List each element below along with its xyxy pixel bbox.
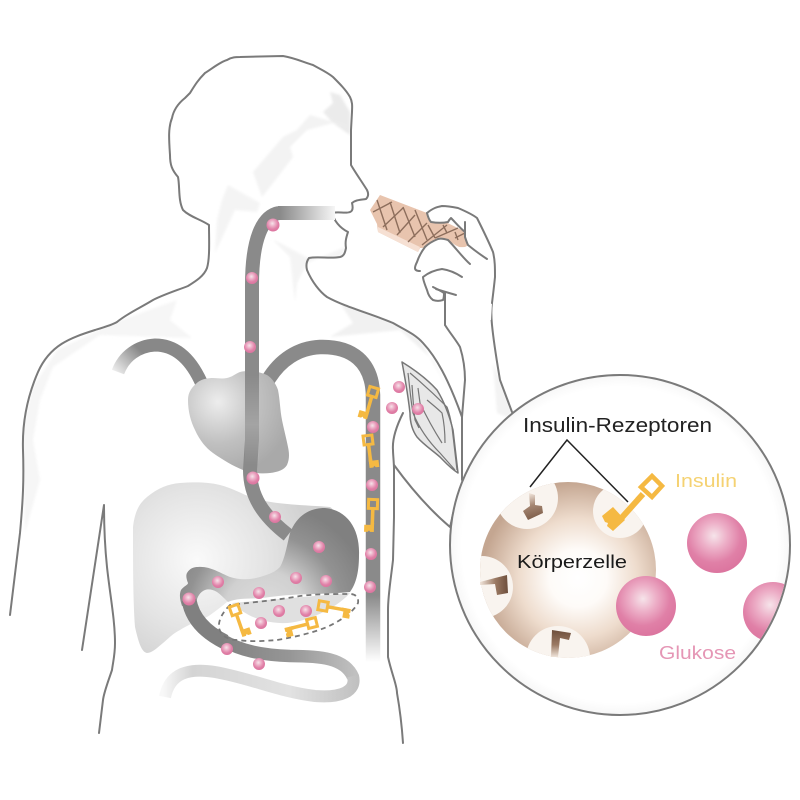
small intestine: [165, 600, 354, 697]
muscle: [402, 362, 458, 473]
dashed outline: [219, 594, 358, 641]
chest line: [394, 465, 455, 527]
left artery: [118, 345, 201, 382]
heart: [188, 371, 289, 473]
liver: [133, 482, 334, 653]
magnified view: [450, 375, 800, 715]
insulin keys in pancreas: [229, 601, 351, 638]
receptors: [480, 493, 571, 657]
wafer bar: [370, 195, 468, 252]
glucose spheres: [616, 513, 784, 639]
insulin key large: [602, 476, 662, 531]
label: receptors: Insulin-Rezeptoren: [523, 415, 712, 437]
head, neck and shoulders contour: [10, 56, 462, 615]
upper arm: [445, 293, 465, 480]
stomach and duodenum: [180, 508, 359, 606]
pancreas: [219, 593, 358, 641]
lens circle: [450, 375, 790, 715]
glucose particles: [182, 218, 405, 670]
hand: [415, 206, 495, 325]
body cell: [480, 482, 656, 658]
esophagus over heart: [250, 345, 288, 535]
pointer lines: [530, 440, 628, 502]
left armpit and torso: [82, 505, 115, 733]
body shading: [23, 92, 512, 533]
right artery: [268, 347, 373, 662]
right torso: [388, 413, 403, 743]
insulin keys in bloodstream: [358, 385, 379, 532]
label: body cell: Körperzelle: [517, 551, 627, 572]
body outline: [10, 56, 512, 743]
label: glucose: Glukose: [659, 642, 736, 663]
hand fill: [415, 206, 495, 320]
label: insulin: Insulin: [675, 470, 737, 491]
esophagus: [252, 213, 335, 375]
